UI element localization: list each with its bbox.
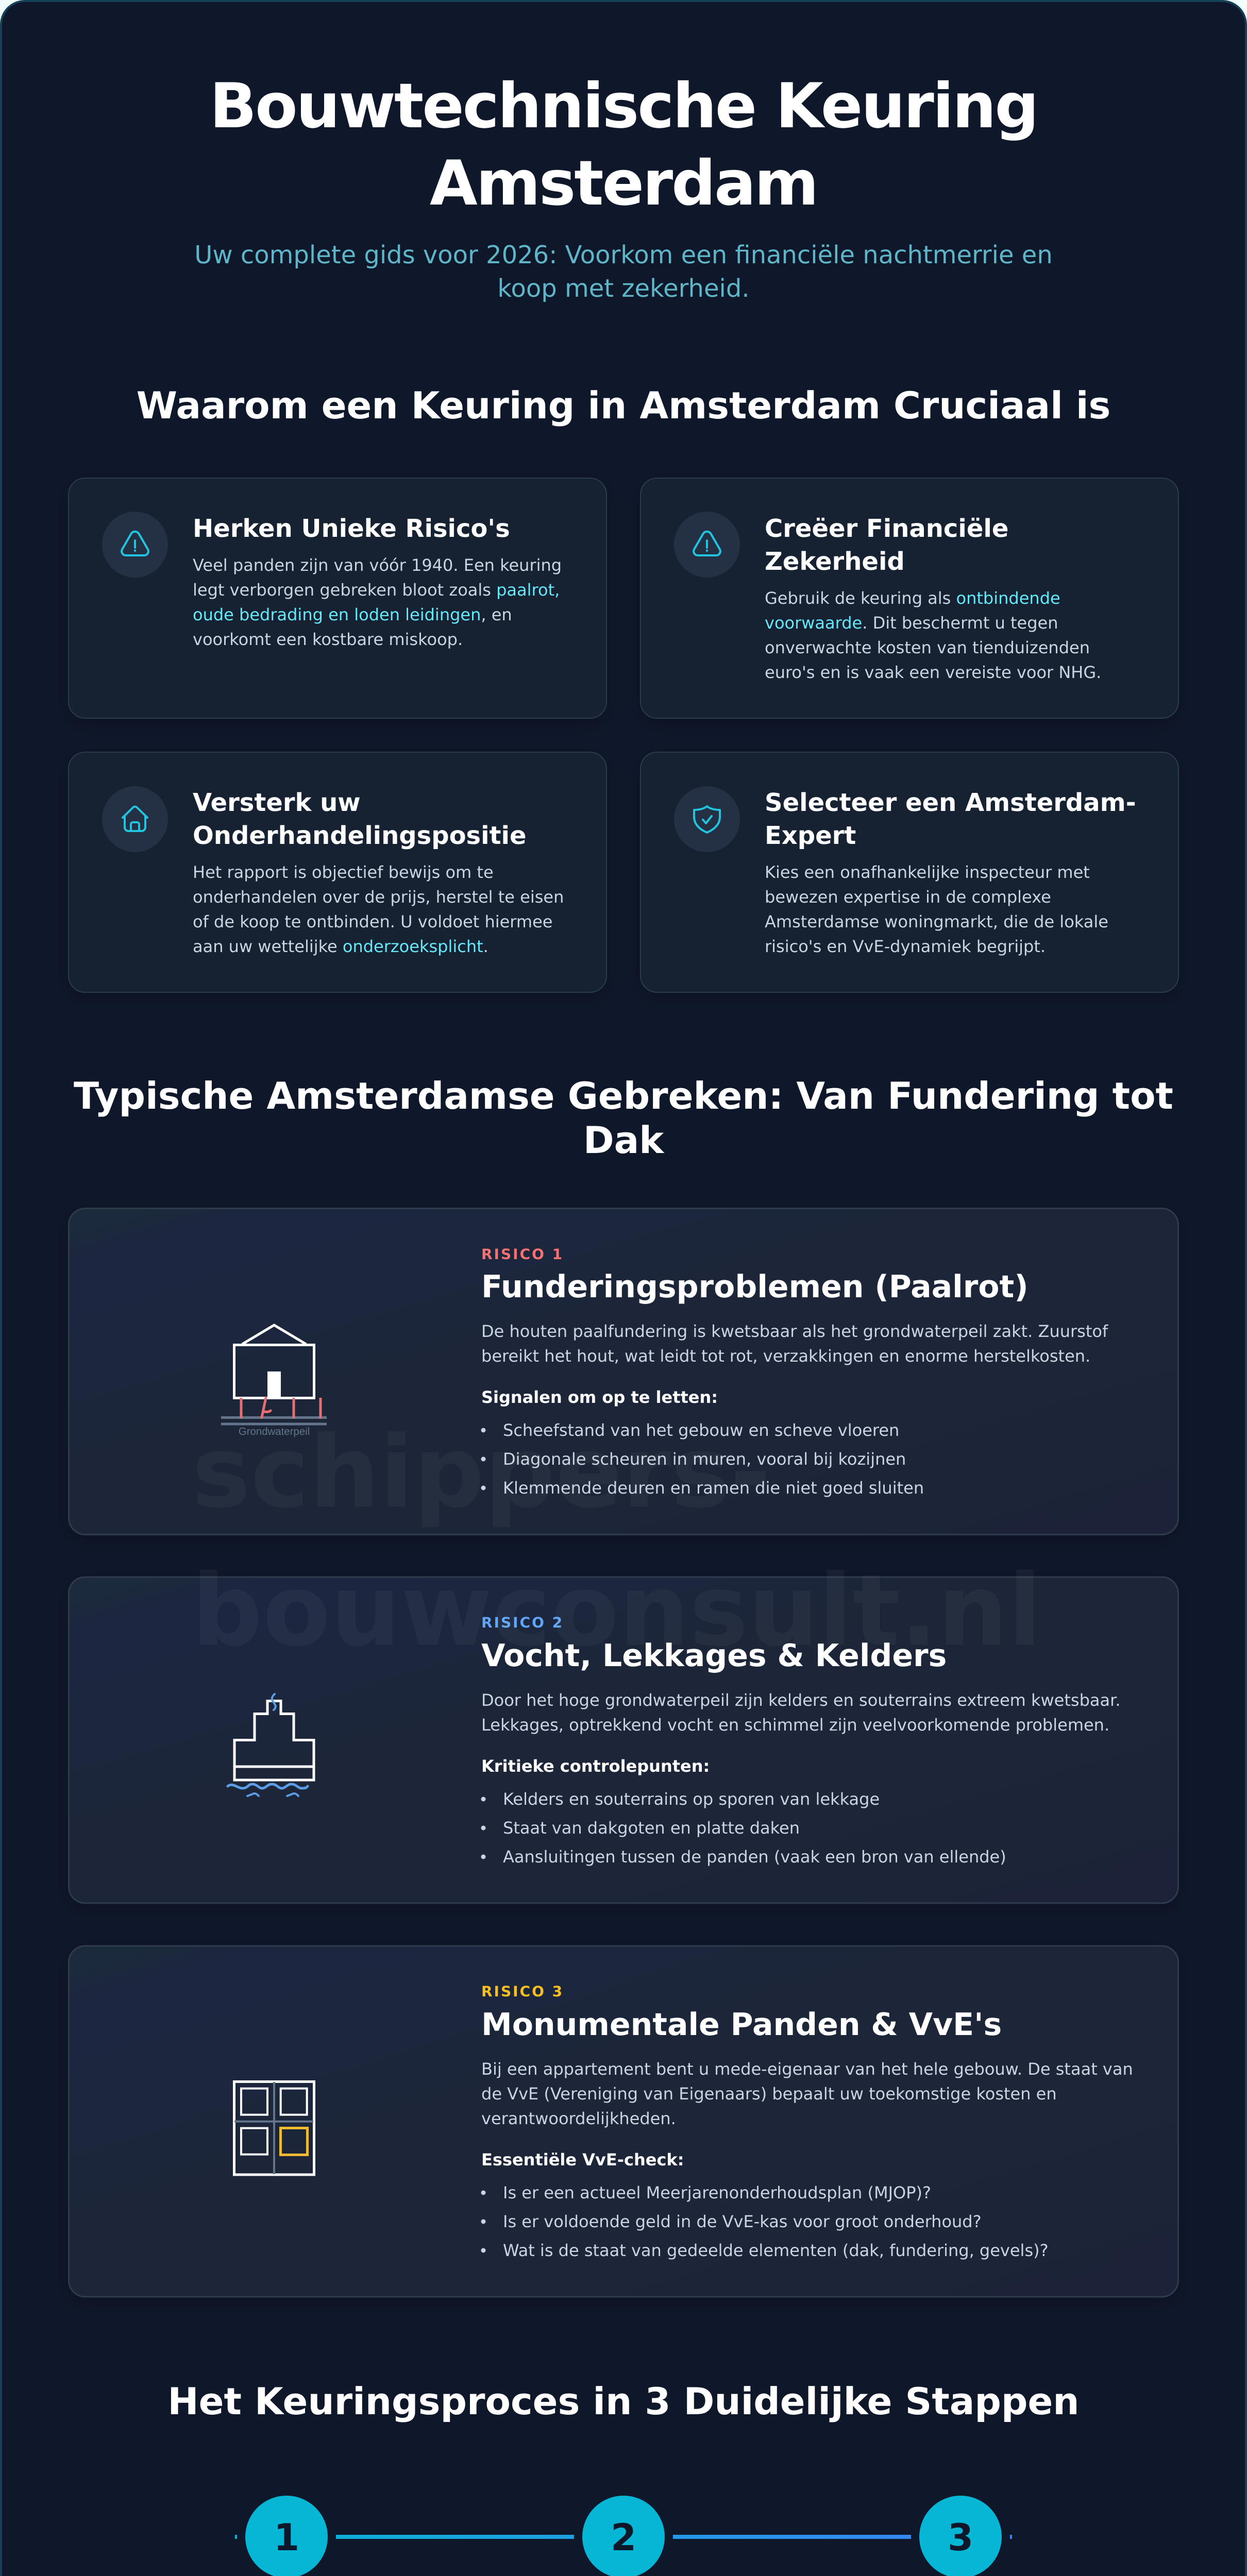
card text: bewezen expertise in de complexe — [765, 887, 1051, 907]
card text: Het rapport is objectief bewijs om te — [193, 862, 494, 882]
checklist — [481, 1420, 924, 1498]
checklist heading: Kritieke controlepunten: — [481, 1756, 710, 1776]
icon: shield with check — [674, 786, 740, 852]
card text — [193, 555, 562, 649]
card text: onderhandelen over de prijs, herstel te eisen — [193, 887, 564, 907]
card text: risico's en VvE-dynamiek begrijpt. — [765, 937, 1046, 956]
title: Amsterdam — [430, 148, 817, 219]
checklist: Diagonale scheuren in muren, vooral bij kozijnen — [503, 1449, 906, 1469]
panel: creeer financiele zekerheid — [641, 478, 1178, 718]
panel: selecteer amsterdam-expert — [641, 752, 1178, 992]
risk description — [481, 2059, 1133, 2128]
card text: onverwachte kosten van tienduizenden — [765, 638, 1090, 657]
step 2 marker — [578, 2492, 669, 2576]
risk label: RISICO 1 — [481, 1246, 564, 1263]
card heading: Selecteer een Amsterdam- — [765, 788, 1136, 817]
heading: waarom: Waarom een Keuring in Amsterdam Cruciaal is — [137, 384, 1110, 427]
card text — [765, 862, 1108, 956]
risk description: verantwoordelijkheden. — [481, 2109, 676, 2128]
checklist heading: Signalen om op te letten: — [481, 1387, 718, 1407]
step 3 marker: 3 — [948, 2516, 973, 2559]
card heading: Expert — [765, 821, 856, 850]
subtitle: koop met zekerheid. — [497, 274, 750, 303]
icon: warning triangle — [674, 512, 740, 578]
card text: legt verborgen gebreken bloot zoals paalrot, — [193, 580, 560, 600]
watermark: schippers- — [192, 1415, 771, 1530]
illustration: house on piles: Grondwaterpeil — [239, 1426, 310, 1437]
watermark — [192, 1415, 1042, 1668]
card text: voorwaarde. Dit beschermt u tegen — [765, 613, 1058, 633]
card text: Veel panden zijn van vóór 1940. Een keuring — [193, 555, 562, 575]
card text: Gebruik de keuring als ontbindende — [765, 588, 1060, 608]
card heading: Onderhandelingspositie — [193, 821, 527, 850]
card text: oude bedrading en loden leidingen, en — [193, 605, 512, 624]
risk description: de VvE (Vereniging van Eigenaars) bepaalt uw toekomstige kosten en — [481, 2084, 1057, 2104]
checklist: Aansluitingen tussen de panden (vaak een bron van ellende) — [503, 1847, 1006, 1867]
panel: versterk onderhandelingspositie — [69, 752, 606, 992]
card heading: Zekerheid — [765, 547, 905, 576]
card text: of de koop te ontbinden. U voldoet hiermee — [193, 912, 552, 931]
card text — [765, 588, 1101, 682]
risk description: Lekkages, optrekkend vocht en schimmel zijn veelvoorkomende problemen. — [481, 1715, 1109, 1735]
subtitle — [194, 241, 1053, 303]
card heading — [193, 788, 527, 850]
card text: aan uw wettelijke onderzoeksplicht. — [193, 937, 488, 956]
risk description: De houten paalfundering is kwetsbaar als het grondwaterpeil zakt. Zuurstof — [481, 1321, 1108, 1341]
step 3 marker — [915, 2492, 1006, 2576]
card heading: Herken Unieke Risico's — [193, 514, 510, 543]
panel: risico 1 — [69, 1209, 1178, 1534]
checklist: Wat is de staat van gedeelde elementen (dak, fundering, gevels)? — [503, 2241, 1049, 2260]
heading: typische gebreken: Dak — [583, 1118, 665, 1162]
risk heading: Monumentale Panden & VvE's — [481, 2007, 1002, 2043]
checklist heading: Essentiële VvE-check: — [481, 2150, 684, 2170]
card text — [193, 862, 564, 956]
panel: risico 2 — [69, 1577, 1178, 1903]
panel: risico 3 — [69, 1946, 1178, 2297]
checklist: Klemmende deuren en ramen die niet goed sluiten — [503, 1478, 924, 1498]
card text: Kies een onafhankelijke inspecteur met — [765, 862, 1090, 882]
card text: Amsterdamse woningmarkt, die de lokale — [765, 912, 1108, 931]
step 1 marker — [241, 2492, 332, 2576]
card heading — [765, 514, 1008, 576]
risk description: Bij een appartement bent u mede-eigenaar van het hele gebouw. De staat van — [481, 2059, 1133, 2079]
step 2 marker: 2 — [611, 2516, 636, 2559]
card heading — [765, 788, 1136, 850]
checklist: Is er voldoende geld in de VvE-kas voor groot onderhoud? — [503, 2212, 982, 2231]
risk description: bereikt het hout, wat leidt tot rot, verzakkingen en enorme herstelkosten. — [481, 1346, 1090, 1366]
icon: warning triangle — [102, 512, 168, 578]
risk description: Door het hoge grondwaterpeil zijn kelders en souterrains extreem kwetsbaar. — [481, 1690, 1120, 1710]
card text: euro's en is vaak een vereiste voor NHG. — [765, 663, 1101, 682]
subtitle: Uw complete gids voor 2026: Voorkom een financiële nachtmerrie en — [194, 241, 1053, 269]
risk heading: Funderingsproblemen (Paalrot) — [481, 1269, 1029, 1305]
heading: typische gebreken: Typische Amsterdamse Gebreken: Van Fundering tot — [74, 1074, 1173, 1117]
checklist — [481, 1789, 1006, 1867]
watermark: bouwconsult.nl — [192, 1554, 1042, 1668]
step 1 marker: 1 — [274, 2516, 299, 2559]
checklist: Staat van dakgoten en platte daken — [503, 1818, 800, 1838]
checklist: Kelders en souterrains op sporen van lekkage — [503, 1789, 880, 1809]
risk description — [481, 1321, 1108, 1366]
risk description — [481, 1690, 1120, 1735]
card heading: Creëer Financiële — [765, 514, 1008, 543]
card text: voorkomt een kostbare miskoop. — [193, 630, 463, 649]
risk label: RISICO 3 — [481, 1983, 564, 2000]
icon: house — [102, 786, 168, 852]
checklist: Scheefstand van het gebouw en scheve vloeren — [503, 1420, 899, 1440]
risk label: RISICO 2 — [481, 1614, 564, 1631]
illustration: apartment building — [234, 2081, 314, 2175]
heading: typische gebreken — [74, 1074, 1173, 1162]
title: Bouwtechnische Keuring — [210, 71, 1037, 142]
checklist — [481, 2183, 1049, 2260]
risk heading: Vocht, Lekkages & Kelders — [481, 1638, 947, 1674]
title — [210, 71, 1037, 219]
illustration: canal house with basement — [228, 1694, 315, 1796]
panel: herken unieke risico's — [69, 478, 606, 718]
heading: keuringsproces: Het Keuringsproces in 3 Duidelijke Stappen — [167, 2380, 1080, 2423]
process timeline — [235, 2492, 1012, 2576]
illustration: house on piles — [221, 1325, 327, 1437]
checklist: Is er een actueel Meerjarenonderhoudsplan (MJOP)? — [503, 2183, 931, 2202]
card heading: Versterk uw — [193, 788, 361, 817]
